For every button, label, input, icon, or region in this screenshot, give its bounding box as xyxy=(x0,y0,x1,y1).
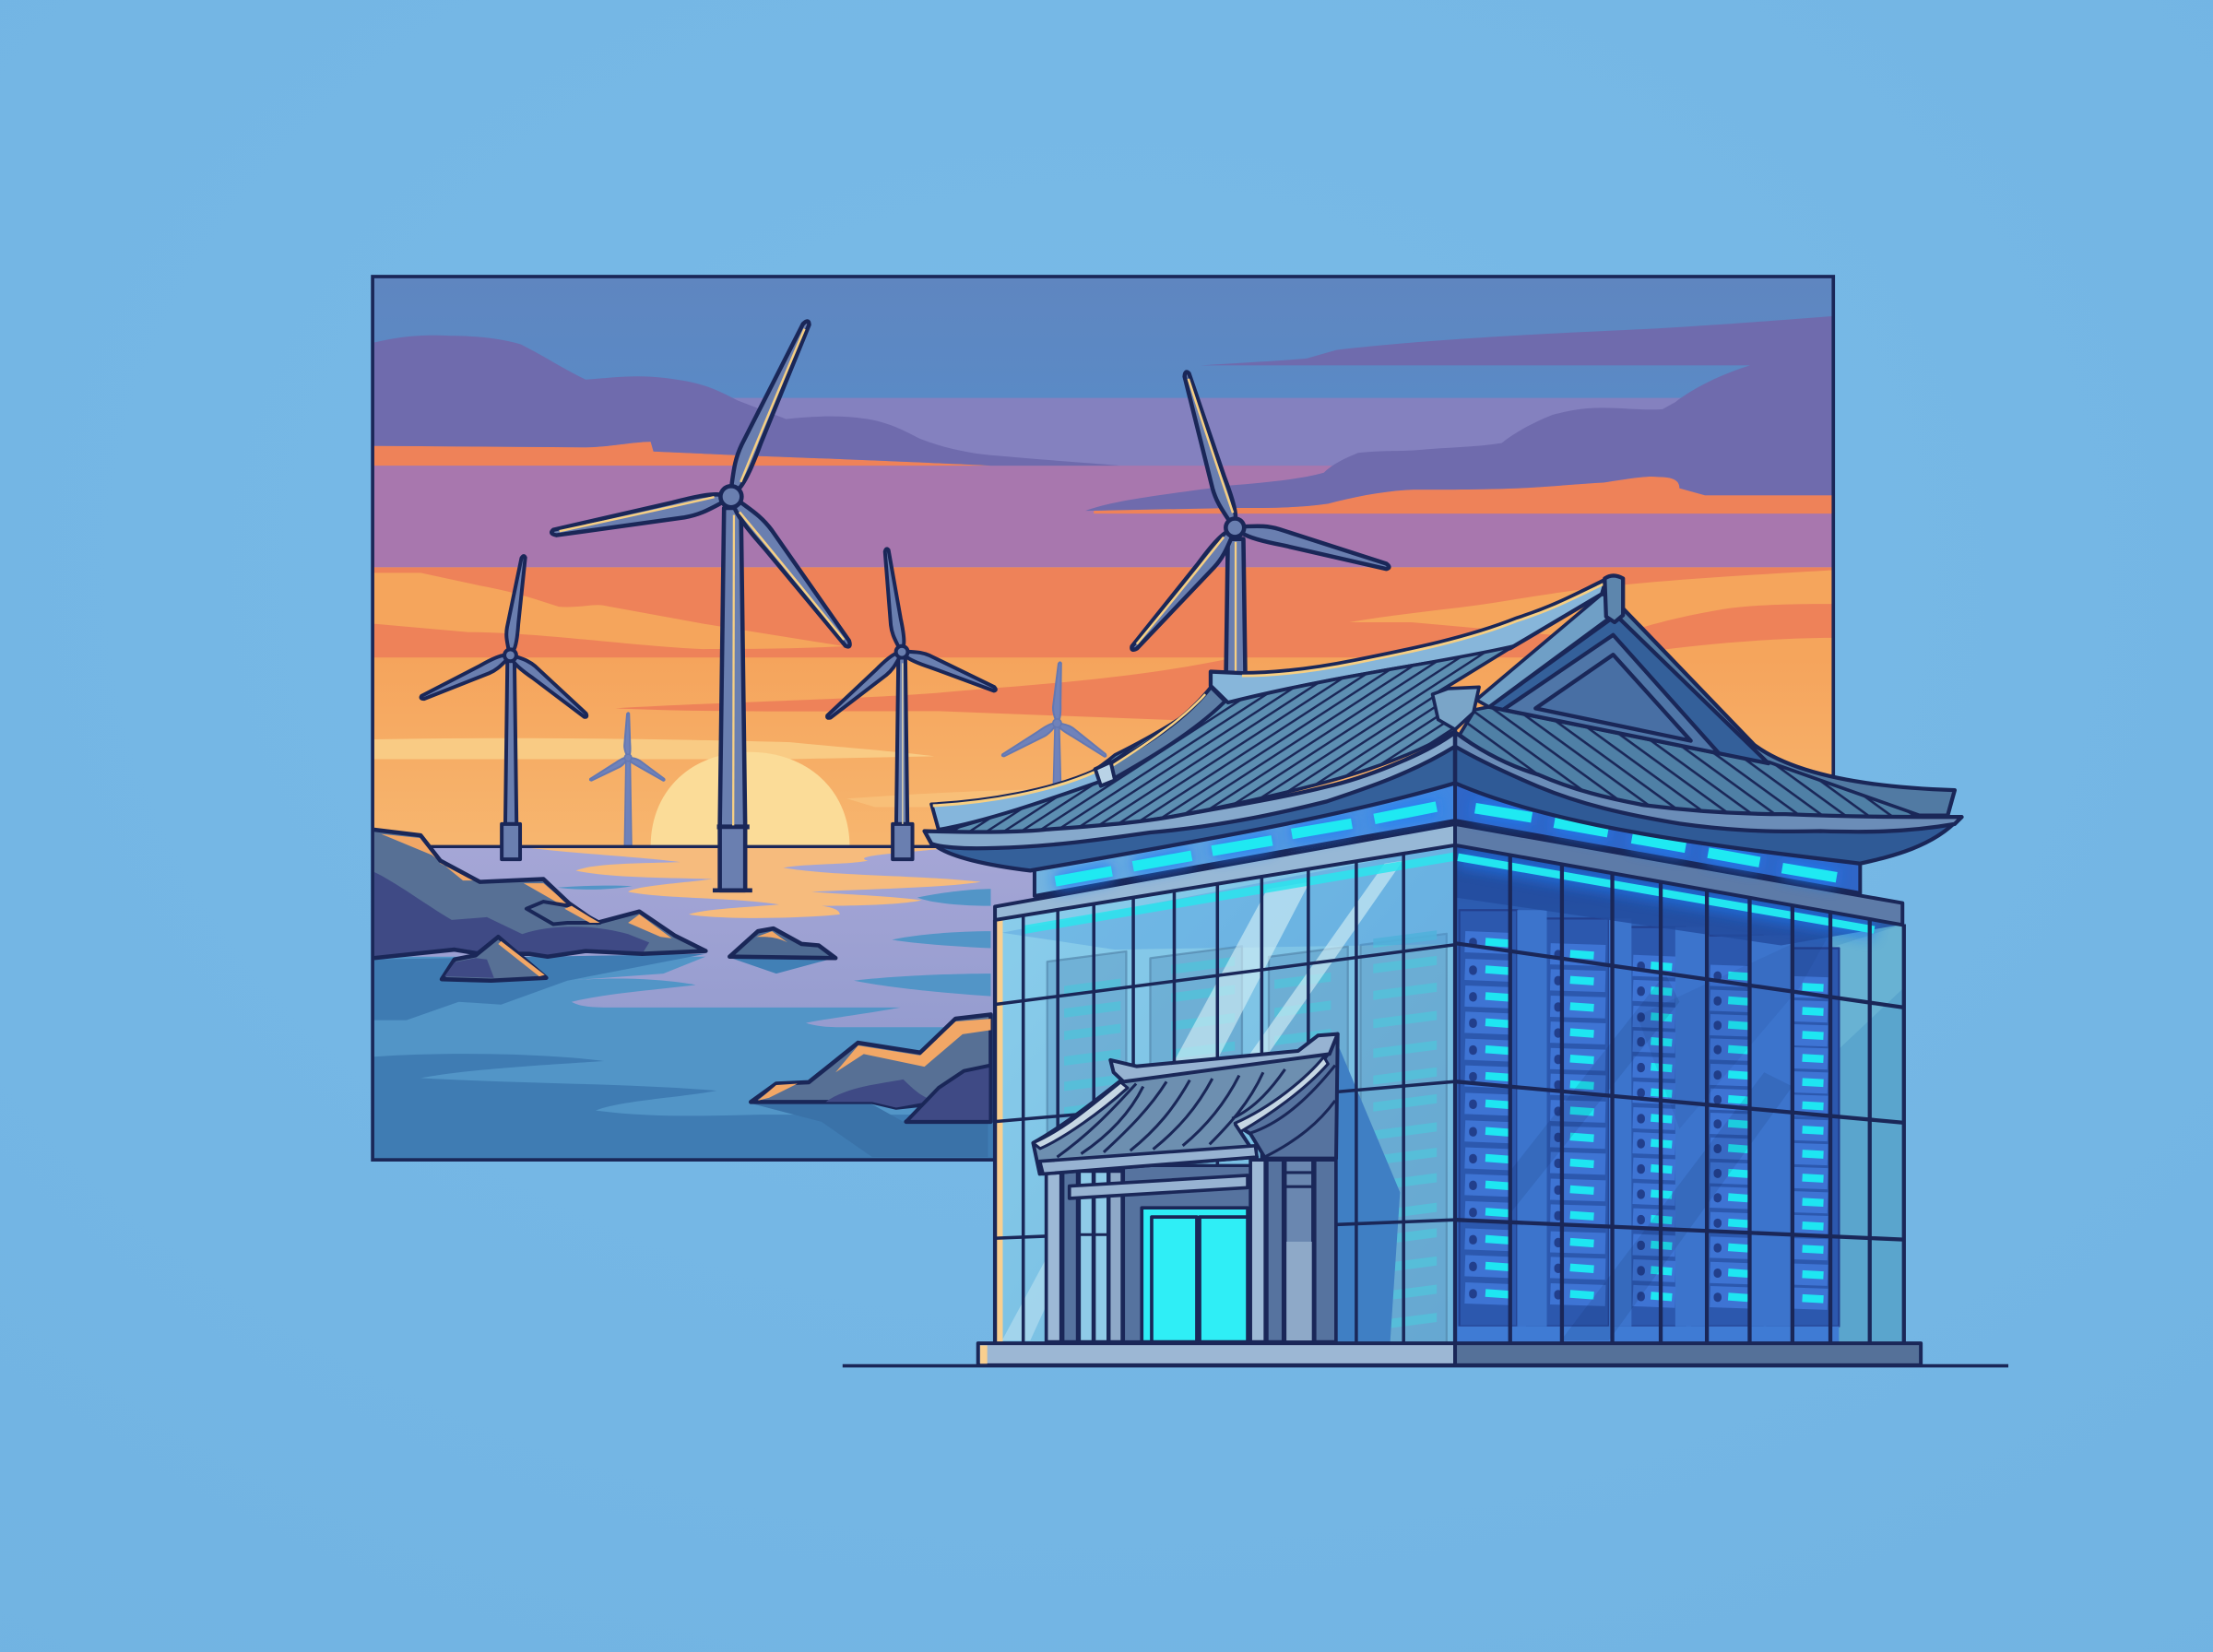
header beam xyxy=(1070,1175,1248,1198)
rock: right shore xyxy=(751,1014,990,1122)
base slab xyxy=(978,1343,1921,1365)
ceiling shadow xyxy=(1002,845,1455,950)
cyan light strip left xyxy=(1024,856,1455,930)
cyan light strip right xyxy=(1458,857,1875,930)
ridge cap xyxy=(1211,579,1606,702)
horizon line xyxy=(423,845,949,847)
finial xyxy=(1604,575,1623,622)
porch gable side xyxy=(1236,1034,1338,1159)
porch back wall xyxy=(1123,1165,1253,1342)
roof lips xyxy=(925,732,1962,848)
sea xyxy=(374,846,1318,1158)
ground line xyxy=(843,1364,2008,1367)
gable bargeboard xyxy=(1476,594,1616,707)
panel: sunset sea scene xyxy=(373,277,1833,1164)
diagonal reflections xyxy=(1510,974,1679,1213)
orange clouds xyxy=(373,442,1833,723)
data center building xyxy=(922,573,1964,1364)
right face mullions xyxy=(1455,856,1904,1342)
hip box ornament xyxy=(1433,687,1479,729)
turbine: far left small xyxy=(589,713,667,846)
porch shadow on glass xyxy=(1336,1042,1400,1342)
porch hip edges xyxy=(1033,1056,1328,1149)
porch eave beam xyxy=(1040,1146,1257,1174)
frieze light glow xyxy=(1056,807,1836,882)
upper right roof edge xyxy=(1553,598,1955,816)
roof corner line xyxy=(1454,729,1456,783)
glass left face xyxy=(997,847,1453,1342)
porch side rafter lines xyxy=(1250,1066,1335,1157)
porch pillars xyxy=(1047,1160,1336,1342)
frieze cyan lights xyxy=(1056,807,1837,881)
eave undersides xyxy=(931,742,1959,870)
sun reflection on water xyxy=(529,848,981,918)
purple clouds xyxy=(373,316,1833,511)
server cyan status bars xyxy=(1485,942,1824,1299)
faded server racks xyxy=(1046,930,1448,1342)
turbine: far right small xyxy=(1001,661,1106,784)
server unit plates xyxy=(1465,942,1828,1299)
porch roof pane xyxy=(1033,1054,1328,1174)
turbine: large foreground xyxy=(550,317,858,891)
left face mullions xyxy=(994,854,1455,1342)
pillar detail xyxy=(1286,1242,1312,1340)
server indicator dots xyxy=(1473,942,1718,1298)
roof hip bands left xyxy=(931,687,1225,830)
rock: center islet xyxy=(729,928,835,958)
server rack bodies xyxy=(1460,910,1839,1327)
turbine: left xyxy=(420,555,591,859)
warm edge light xyxy=(997,920,1003,1342)
turbine: right behind roof xyxy=(1128,371,1391,691)
ceiling shadow right xyxy=(1457,874,1896,946)
rocks: left shore xyxy=(374,830,705,981)
glass door xyxy=(1142,1208,1248,1342)
turbine: center xyxy=(825,549,999,859)
frieze with lights xyxy=(1035,783,1860,896)
glass reflections xyxy=(1174,882,1309,1061)
illustration: offshore wind farm and hanok data center xyxy=(371,275,2008,1368)
porch roof tile lines xyxy=(1057,1069,1285,1157)
sun xyxy=(651,752,849,846)
roof pane right xyxy=(1455,707,1936,824)
building outline xyxy=(995,845,1904,1343)
roof pane left xyxy=(939,646,1513,832)
gable triangle xyxy=(1489,615,1769,763)
server right face xyxy=(1455,840,1907,1348)
entrance porch xyxy=(1033,1034,1338,1342)
scene frame border xyxy=(373,277,1833,1160)
cornice band xyxy=(995,824,1902,925)
porch ridge xyxy=(1110,1034,1338,1081)
sky bands xyxy=(373,277,1833,848)
